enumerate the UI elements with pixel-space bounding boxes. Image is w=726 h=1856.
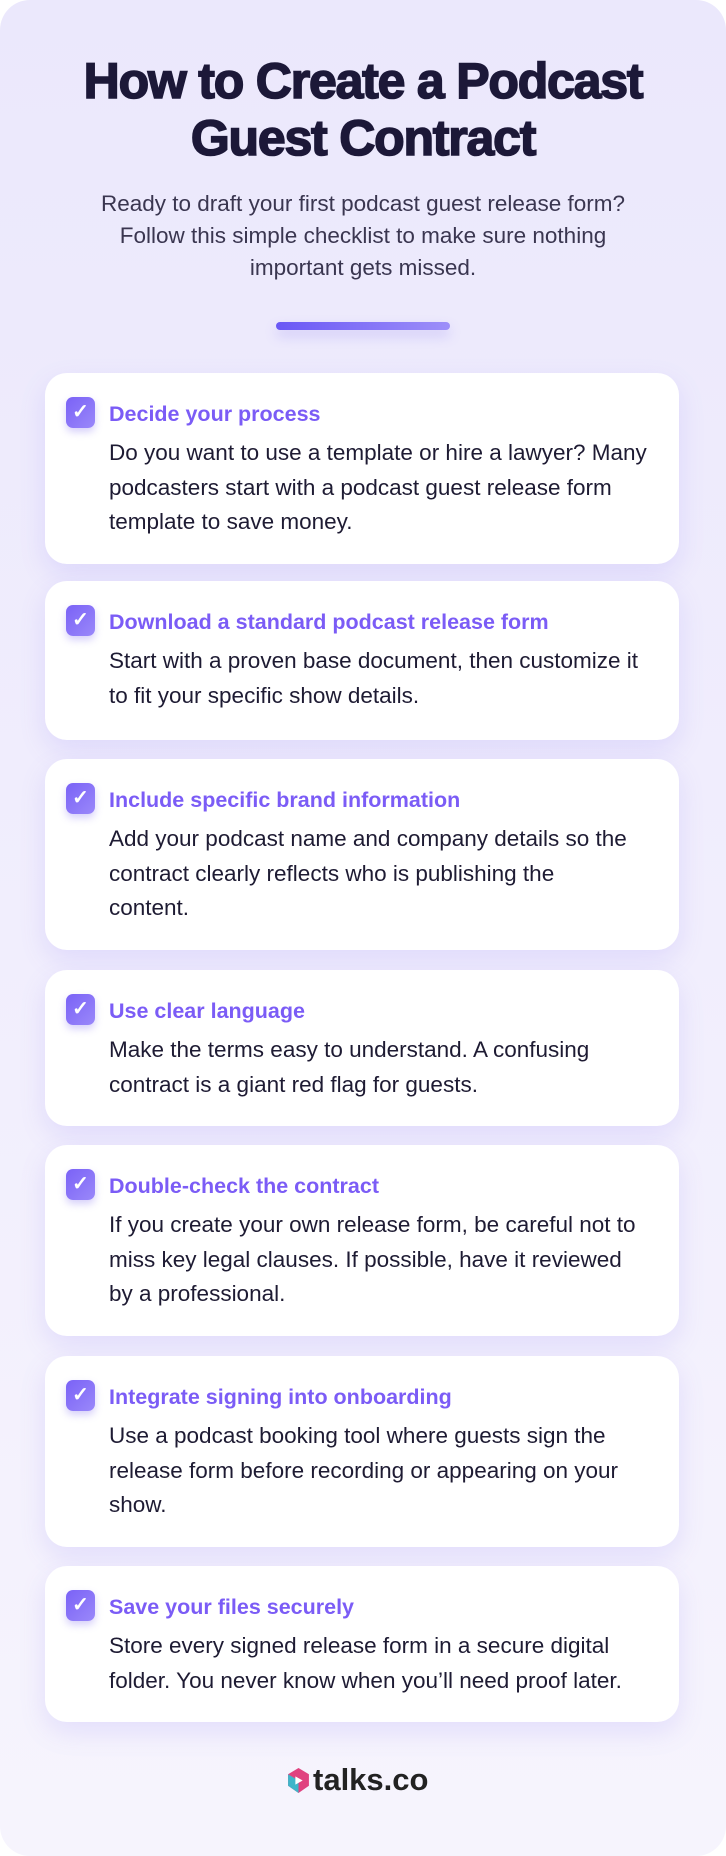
card: clear language bbox=[45, 970, 679, 1126]
card: save files: Store every signed release form in a secure digital bbox=[109, 1633, 609, 1658]
card: double-check: If you create your own release form, be careful not to bbox=[109, 1212, 636, 1237]
card: save files bbox=[45, 1566, 679, 1722]
card: decide your process: Do you want to use a template or hire a lawyer? Many bbox=[109, 440, 647, 465]
subtitle: Ready to draft your first podcast guest release form? bbox=[101, 191, 625, 216]
card: download form: to fit your specific show details. bbox=[109, 682, 419, 708]
card: decide your process: ✓ bbox=[72, 401, 89, 423]
card: clear language: Make the terms easy to understand. A confusing bbox=[109, 1037, 589, 1062]
logo: talks.co bbox=[313, 1762, 428, 1797]
card: save files: folder. You never know when you’ll need proof later. bbox=[109, 1668, 622, 1692]
card: download form bbox=[45, 581, 679, 740]
subtitle: important gets missed. bbox=[250, 255, 476, 280]
card: decide your process bbox=[45, 373, 679, 564]
accent bar bbox=[276, 322, 450, 330]
card: double-check bbox=[45, 1145, 679, 1336]
card: decide your process: Decide your process bbox=[109, 402, 321, 426]
title: Guest Contract bbox=[191, 110, 535, 166]
card: decide your process: podcasters start with a podcast guest release form bbox=[109, 474, 612, 500]
card: clear language: Use clear language bbox=[109, 999, 305, 1023]
card: save files: Save your files securely bbox=[109, 1595, 354, 1619]
card: double-check: ✓ bbox=[72, 1173, 89, 1195]
card: onboarding: show. bbox=[109, 1492, 167, 1517]
card: double-check: miss key legal clauses. If possible, have it reviewed bbox=[109, 1246, 622, 1272]
card: brand information: contract clearly reflects who is publishing the bbox=[109, 860, 554, 886]
card: download form: Start with a proven base document, then customize it bbox=[109, 648, 638, 673]
card: clear language: contract is a giant red flag for guests. bbox=[109, 1072, 478, 1096]
card: onboarding: ✓ bbox=[72, 1384, 89, 1406]
card: download form: Download a standard podcast release form bbox=[109, 610, 549, 634]
card: onboarding: release form before recording or appearing on your bbox=[109, 1458, 618, 1482]
card: double-check: Double-check the contract bbox=[109, 1174, 379, 1198]
card: onboarding: Use a podcast booking tool where guests sign the bbox=[109, 1423, 606, 1448]
card: brand information: content. bbox=[109, 895, 189, 920]
card: decide your process: template to save money. bbox=[109, 509, 352, 534]
card: brand information: Add your podcast name and company details so the bbox=[109, 826, 627, 851]
card: double-check: by a professional. bbox=[109, 1281, 285, 1306]
card: clear language: ✓ bbox=[72, 998, 89, 1020]
card: brand information: ✓ bbox=[72, 787, 89, 809]
card: save files: ✓ bbox=[72, 1594, 89, 1616]
card: download form: ✓ bbox=[72, 609, 89, 631]
card: onboarding bbox=[45, 1356, 679, 1547]
subtitle: Follow this simple checklist to make sure nothing bbox=[120, 223, 606, 248]
title bbox=[84, 53, 644, 166]
subtitle bbox=[101, 191, 625, 280]
card: brand information: Include specific brand information bbox=[109, 788, 460, 812]
card: onboarding: Integrate signing into onboarding bbox=[109, 1385, 452, 1409]
title: How to Create a Podcast bbox=[84, 53, 642, 109]
card: brand information bbox=[45, 759, 679, 950]
